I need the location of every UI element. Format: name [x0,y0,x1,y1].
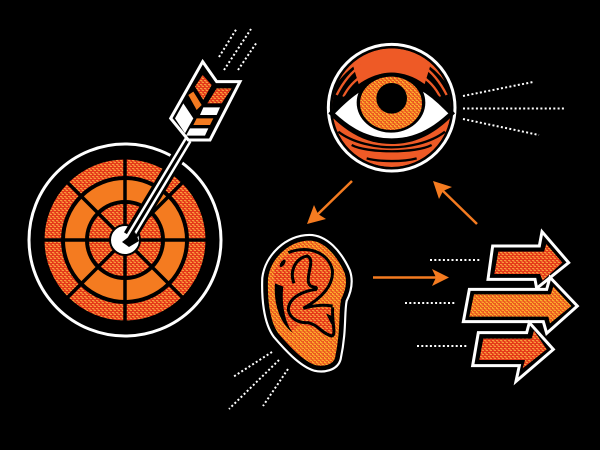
icon: three arrows [463,232,577,381]
eyelids [330,48,453,167]
icon: eye [328,44,455,171]
arrow: eye to ear [307,181,352,224]
iris and pupil [357,73,425,133]
eye white [328,73,455,144]
eye sight dots [463,82,566,135]
top arrow [488,232,569,288]
arrow: arrows to eye [433,181,477,224]
infographic illustration [28,28,580,410]
target board [29,144,221,336]
icon: target with arrow [29,28,257,336]
bottom arrow [473,323,553,381]
middle arrow [463,277,577,333]
arrow fletching [171,62,240,140]
inner ear [273,250,334,337]
arrow: ear to arrows [373,269,449,286]
arrow motion dots [405,260,480,346]
icon: ear [266,238,348,368]
ear sound dots [229,352,288,409]
motion dots [219,28,257,70]
arrow shaft [122,140,188,247]
